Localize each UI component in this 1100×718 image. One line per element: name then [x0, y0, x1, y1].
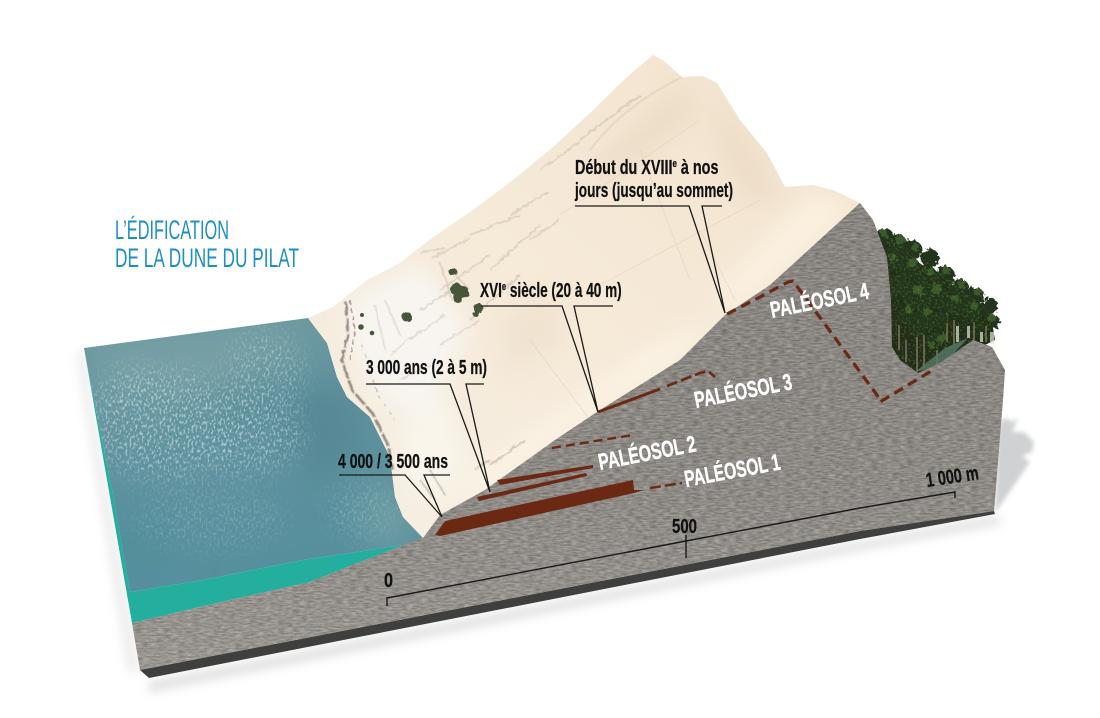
scale label 500: 500 [672, 516, 697, 538]
sand texture: shoreline dark streaks [342, 300, 395, 470]
callout: début du XVIIIe: jours (jusqu’au sommet) [574, 180, 733, 202]
forest cast shadow on the right [995, 418, 1034, 513]
sand grid lines [530, 120, 760, 420]
callout: XVIe siècle: siècle (20 à 40 m) [506, 279, 622, 302]
sea [80, 318, 424, 593]
infographic: block diagram of the Pilat dune [77, 55, 1036, 694]
scale bar [384, 462, 980, 606]
sea edge: teal water section [84, 348, 423, 623]
paléosol 2: upper layer [497, 465, 593, 485]
dune sand surface [308, 55, 860, 538]
base underside edge [140, 511, 995, 678]
cross-section rock [125, 200, 1010, 675]
label: paléosol 3: PALÉOSOL 3 [692, 368, 794, 413]
title: DE LA DUNE DU PILAT [115, 243, 299, 273]
icon: pine forest [877, 225, 1005, 378]
paléosol 3: dashes [667, 371, 715, 386]
paléosol 4: dashes [727, 281, 933, 402]
paléosol layers [435, 281, 933, 536]
paléosol 2: dashes [552, 435, 633, 448]
callout: 4 000 / 3 500 ans: 4 000 / 3 500 ans [338, 451, 448, 473]
title: L’ÉDIFICATION [115, 215, 229, 245]
paléosol 1: thick layer [435, 480, 643, 536]
paléosol 1: dashes [650, 483, 682, 488]
callout: XVIe siècle: XVI [480, 279, 502, 302]
sand shading: soft ridges [346, 102, 839, 490]
paléosol 2: lower layer [477, 473, 587, 501]
callout: début du XVIIIe: Début du XVIII [575, 156, 672, 179]
scale label 1000 m: 1 000 m [924, 462, 980, 492]
callout: 3 000 ans: 3 000 ans (2 à 5 m) [366, 357, 487, 379]
callout: 3 000 ans [366, 357, 490, 492]
callout: 4 000 / 3 500 ans [338, 451, 450, 517]
callout: début du XVIIIe: à nos [677, 156, 718, 179]
scale label 0: 0 [384, 570, 393, 592]
label: paléosol 1: PALÉOSOL 1 [682, 448, 782, 492]
bush clusters on the dune [358, 268, 483, 335]
block drop shadow [76, 350, 1000, 692]
paléosol 3: solid part [598, 389, 660, 412]
callout: début du XVIIIe [574, 156, 733, 313]
callout: début du XVIIIe: e [672, 158, 677, 170]
title [115, 215, 299, 273]
label: paléosol 2: PALÉOSOL 2 [596, 430, 698, 475]
callout: XVIe siècle [480, 279, 622, 412]
label: paléosol 4: PALÉOSOL 4 [768, 276, 871, 323]
sand texture: wind streaks [375, 95, 640, 500]
sand fold under the summit [590, 77, 682, 150]
callout: XVIe siècle: e [502, 279, 506, 292]
